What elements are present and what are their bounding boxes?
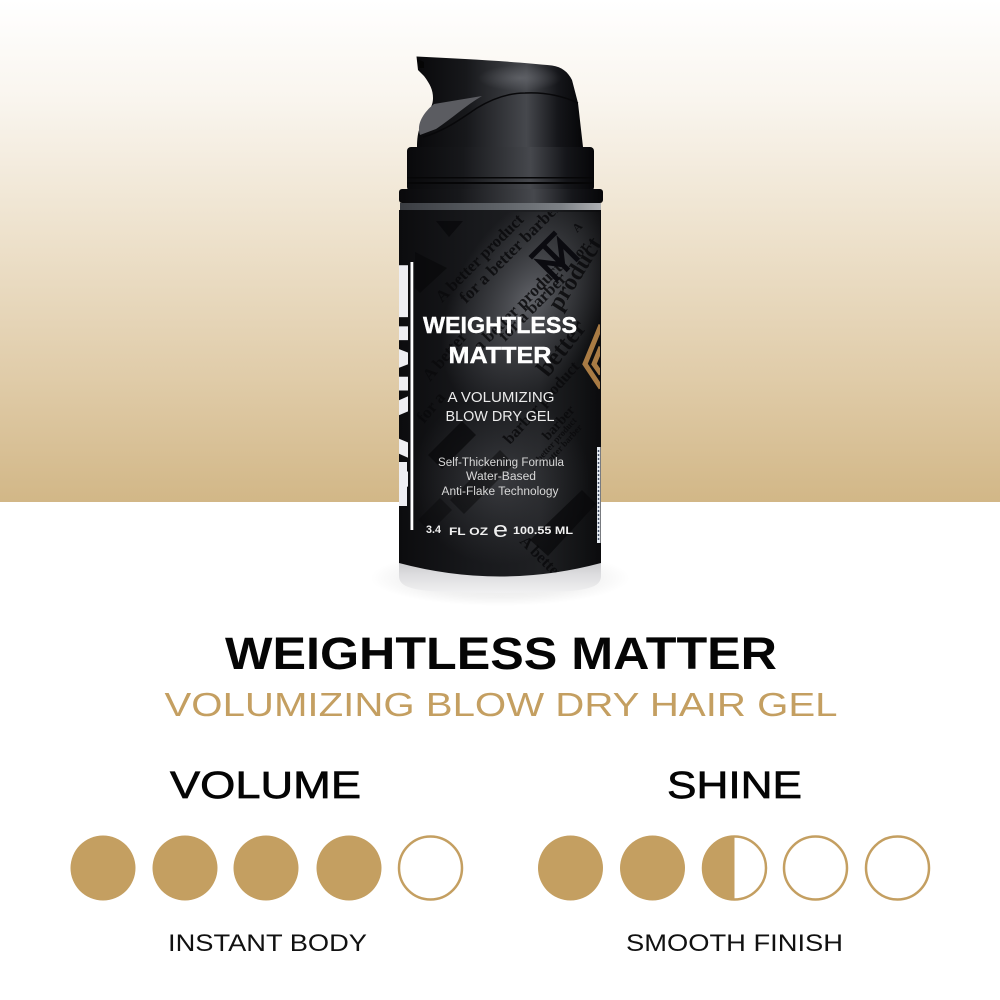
- shine caption: SMOOTH FINISH: [626, 930, 843, 957]
- label pattern text: for: [568, 239, 593, 265]
- label pattern text: for a: [413, 388, 449, 427]
- label features: Water-Based: [466, 471, 536, 483]
- label pattern text: product: [543, 233, 608, 315]
- panel: shine: [538, 765, 929, 957]
- label pattern text: for a better barber: [455, 197, 565, 307]
- label title: [423, 312, 577, 368]
- label title: WEIGHTLESS: [423, 312, 577, 338]
- label pattern text: A better product: [431, 210, 528, 306]
- label pattern text: barber product: [500, 358, 584, 448]
- pump head: [416, 56, 583, 147]
- label volume line: [426, 517, 573, 542]
- bottle sheen: [432, 212, 600, 540]
- brand name vertical: TAME: [344, 263, 424, 506]
- label pattern text: [432, 212, 600, 573]
- label pattern text: better barber: [542, 422, 584, 467]
- subtitle: VOLUMIZING BLOW DRY HAIR GEL: [164, 686, 838, 723]
- label subtitle: BLOW DRY GEL: [446, 409, 554, 425]
- copper logo: [585, 325, 601, 388]
- bottle clear base: [399, 555, 601, 593]
- bottle shadow: [370, 550, 630, 606]
- bottle body: [399, 210, 601, 576]
- label volume line: e: [493, 517, 508, 542]
- product bottle: [396, 56, 604, 600]
- shine rating dots: [538, 836, 929, 900]
- label logo: TM monogram: [530, 232, 581, 283]
- volume caption: INSTANT BODY: [168, 930, 367, 957]
- collar: [399, 147, 603, 212]
- label volume line: 3.4: [426, 524, 442, 536]
- barcode strip: [597, 447, 600, 543]
- panel: volume: [70, 765, 462, 957]
- main title: WEIGHTLESS MATTER: [225, 628, 777, 679]
- volume rating dots: [70, 836, 462, 900]
- label pattern text: barber: [540, 403, 579, 444]
- gradient background band: [0, 0, 1000, 502]
- shine heading: SHINE: [667, 765, 802, 807]
- label title: MATTER: [448, 342, 552, 368]
- label features: Self-Thickening Formula: [438, 457, 565, 469]
- label pattern text: A better: [516, 533, 567, 584]
- label features: [438, 457, 565, 498]
- label pattern text: better product: [534, 415, 579, 463]
- volume heading: VOLUME: [170, 765, 361, 807]
- label pattern text: A: [569, 219, 585, 235]
- brand name vertical: [399, 262, 414, 530]
- label subtitle: [446, 390, 554, 425]
- label features: Anti-Flake Technology: [442, 486, 559, 498]
- label pattern text: A better: [419, 327, 471, 385]
- label pattern text: a better product: [469, 258, 566, 355]
- label dark monogram shapes: [428, 221, 585, 556]
- label volume line: 100.55 ML: [513, 525, 573, 537]
- label pattern text: for a barber: [494, 269, 571, 345]
- label subtitle: A VOLUMIZING: [448, 390, 554, 406]
- label volume line: FL OZ: [449, 526, 488, 538]
- label pattern text: better: [531, 315, 592, 382]
